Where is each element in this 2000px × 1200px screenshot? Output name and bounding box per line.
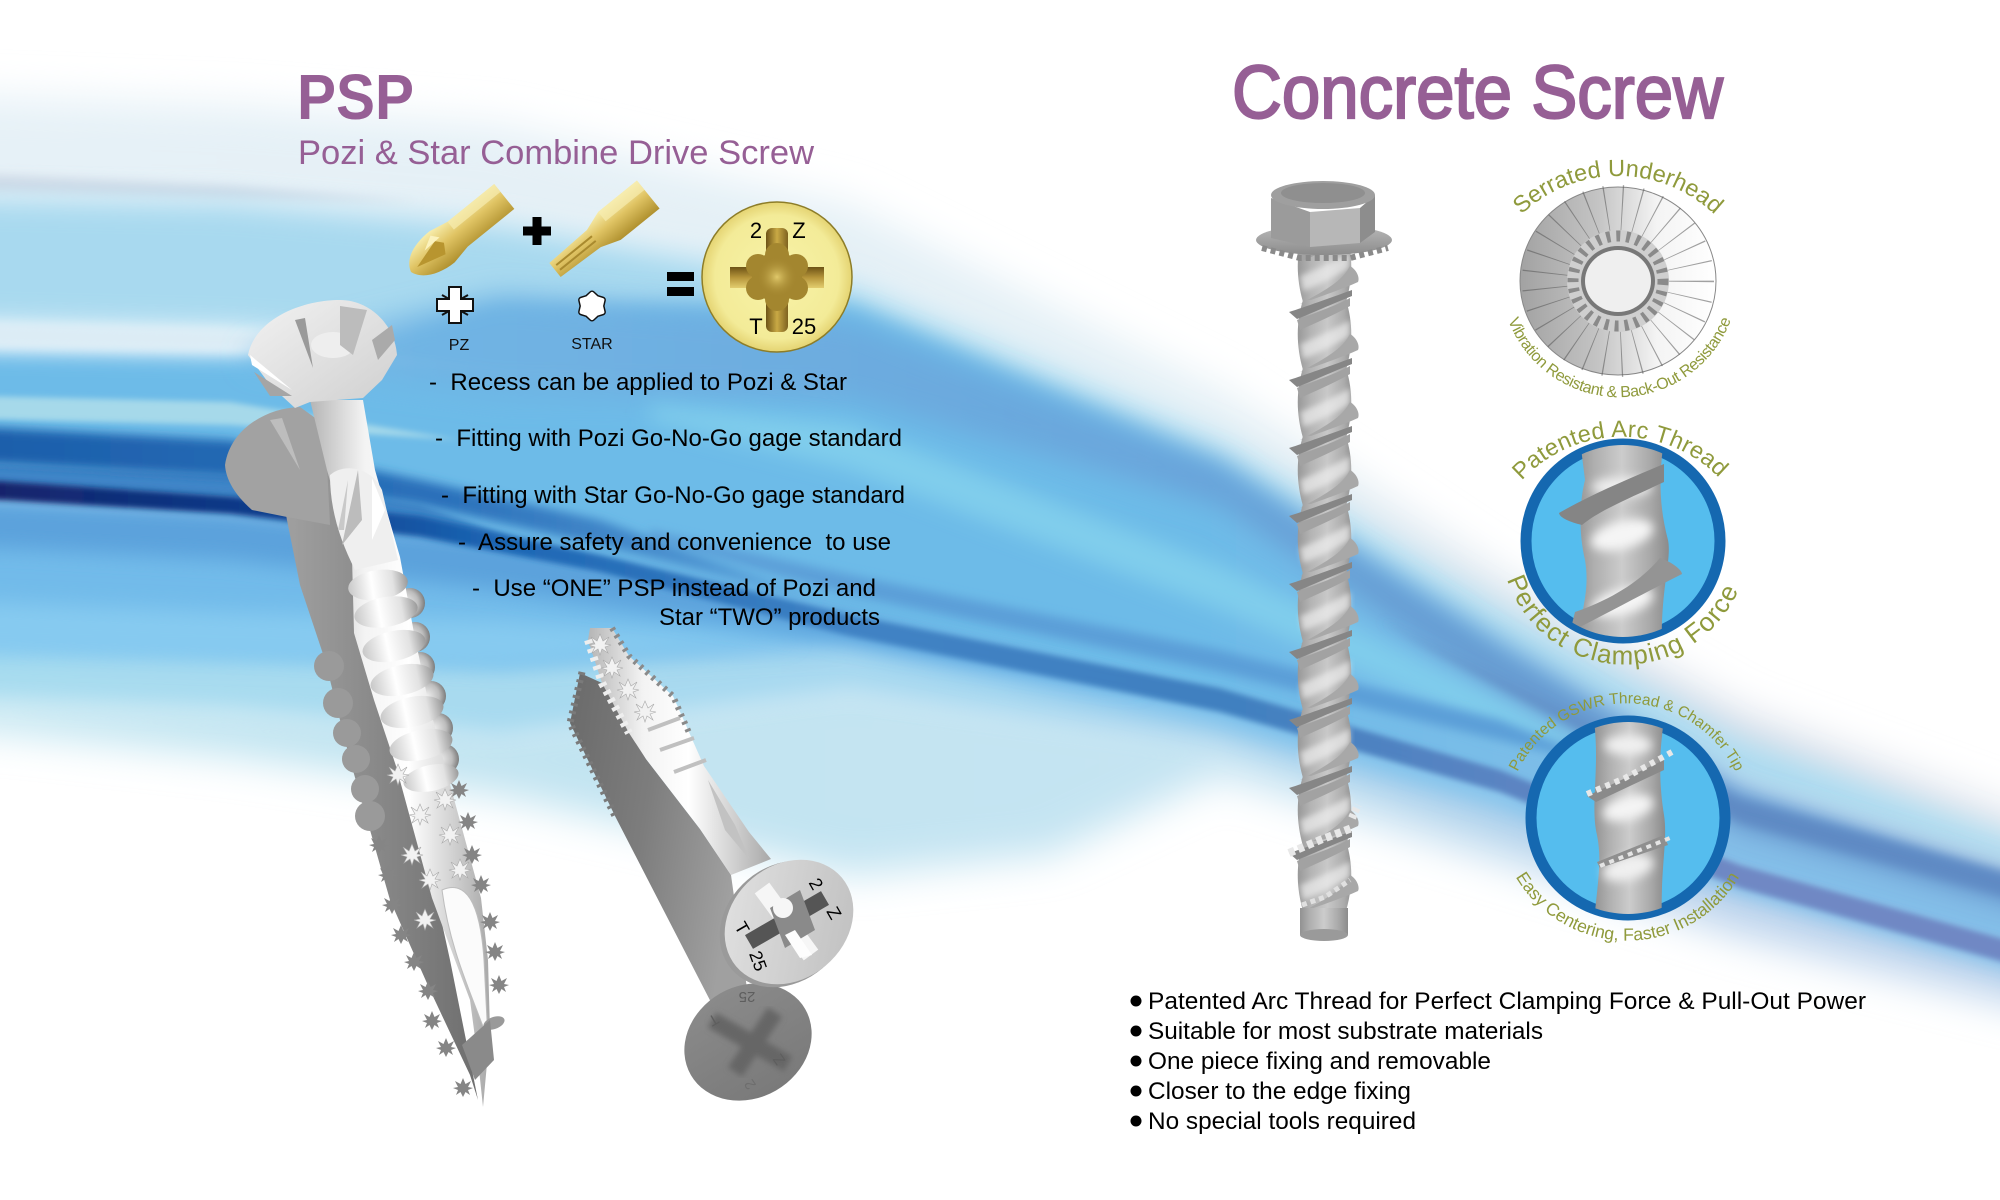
text block: PSP benefits: Star “TWO” products <box>659 604 880 631</box>
heading: Concrete Screw: Concrete Screw <box>1232 50 1724 134</box>
illustration: PSP screw shadow copy, head view <box>570 672 833 1123</box>
icon: combined pozi and star recess disc <box>702 202 852 352</box>
illustration: concrete screw <box>1256 181 1392 941</box>
icon: plus sign <box>523 217 551 245</box>
curved label: Patented GSWR Thread and Chamfer Tip: Patented GSWR Thread & Chamfer Tip <box>1508 692 1742 771</box>
curved label: Vibration Resistant and Back-Out Resistance: Vibration Resistant & Back-Out Resistance <box>1510 316 1730 398</box>
icon: combined pozi and star recess disc: Z <box>792 218 806 243</box>
curved label: Patented Arc Thread: Patented Arc Thread <box>1512 420 1730 480</box>
bullet list: concrete screw benefits: Suitable for most substrate materials <box>1148 1018 1543 1045</box>
text block: PSP benefits <box>429 369 905 631</box>
illustration: PSP screw, head view with recess markings: 25 <box>745 948 771 974</box>
curved label: Serrated Underhead: Serrated Underhead <box>1514 160 1725 214</box>
text block: PSP benefits: - Fitting with Star Go-No-Go gage standard <box>441 482 905 509</box>
text block: PSP benefits: - Fitting with Pozi Go-No-Go gage standard <box>435 425 902 452</box>
illustration: PSP screw, head view with recess markings: 2 <box>805 875 827 893</box>
bullet list: concrete screw benefits: Closer to the edge fixing <box>1148 1078 1411 1105</box>
feature: patented GSWR thread and chamfer tip <box>1508 692 1742 943</box>
illustration: PSP screw shadow copy, head view: 25 <box>739 988 755 1005</box>
icon: PZ recess <box>437 287 473 323</box>
icon: star drive bit <box>544 180 660 284</box>
illustration: PSP screw, head view with recess markings <box>588 628 878 1013</box>
heading: PSP: PSP <box>297 61 414 133</box>
feature: serrated underhead <box>1510 160 1730 398</box>
label: STAR: STAR <box>571 336 613 353</box>
icon: combined pozi and star recess disc: 2 <box>750 218 762 243</box>
bullet list: concrete screw benefits: One piece fixing and removable <box>1148 1048 1491 1075</box>
text block: PSP benefits: - Recess can be applied to Pozi & Star <box>429 369 847 396</box>
bullet list: concrete screw benefits: Patented Arc Thread for Perfect Clamping Force & Pull-Out Power <box>1148 988 1866 1015</box>
feature: patented arc thread <box>1508 420 1737 670</box>
icon: combined pozi and star recess disc: 25 <box>792 314 816 339</box>
bullet list: concrete screw benefits: No special tools required <box>1148 1108 1416 1135</box>
illustration: PSP screw shadow copy, side view <box>225 407 478 1100</box>
subheading: PSP: Pozi & Star Combine Drive Screw <box>298 134 814 172</box>
icon: star recess <box>582 294 602 318</box>
illustration: PSP screw, head view with recess markings: T <box>731 918 753 938</box>
illustration: PSP screw shadow copy, head view: T <box>705 1010 721 1029</box>
label: PZ: PZ <box>449 337 469 354</box>
icon: combined pozi and star recess disc: T <box>749 314 763 339</box>
icon: equals sign <box>667 272 694 296</box>
text block: PSP benefits: - Assure safety and convenience to use <box>458 529 891 556</box>
background: flowing blue ribbon <box>0 95 2000 1015</box>
illustration: PSP screw, side view <box>248 300 509 1107</box>
illustration: PSP screw shadow copy, head view: 2 <box>741 1076 760 1093</box>
curved label: Easy Centering, Faster Installation: Easy Centering, Faster Installation <box>1516 872 1739 943</box>
illustration: PSP screw shadow copy, head view: Z <box>770 1051 789 1068</box>
text block: PSP benefits: - Use “ONE” PSP instead of Pozi and <box>472 575 876 602</box>
icon: pozi drive bit <box>398 181 517 288</box>
bullet list: concrete screw benefits <box>1130 988 1866 1135</box>
illustration: PSP screw, head view with recess markings: Z <box>823 903 845 923</box>
curved label: Perfect Clamping Force: Perfect Clamping Force <box>1508 574 1737 670</box>
